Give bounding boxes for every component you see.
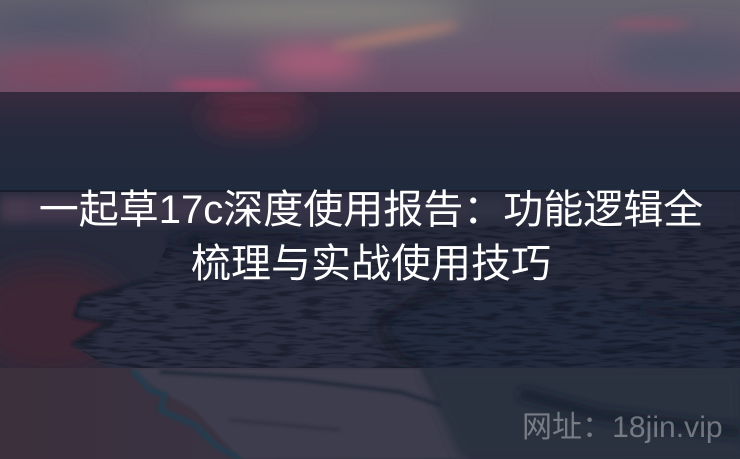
dark sea band (0, 92, 740, 150)
dark beach band (0, 190, 740, 375)
title: 梳理与实战使用技巧 (191, 242, 551, 286)
lighter foreground beach band (0, 368, 740, 459)
sky (0, 0, 740, 92)
title (39, 188, 703, 286)
title: 一起草17c深度使用报告：功能逻辑全 (39, 188, 703, 232)
watermark: site address: 网址：18jin.vip (522, 411, 723, 444)
